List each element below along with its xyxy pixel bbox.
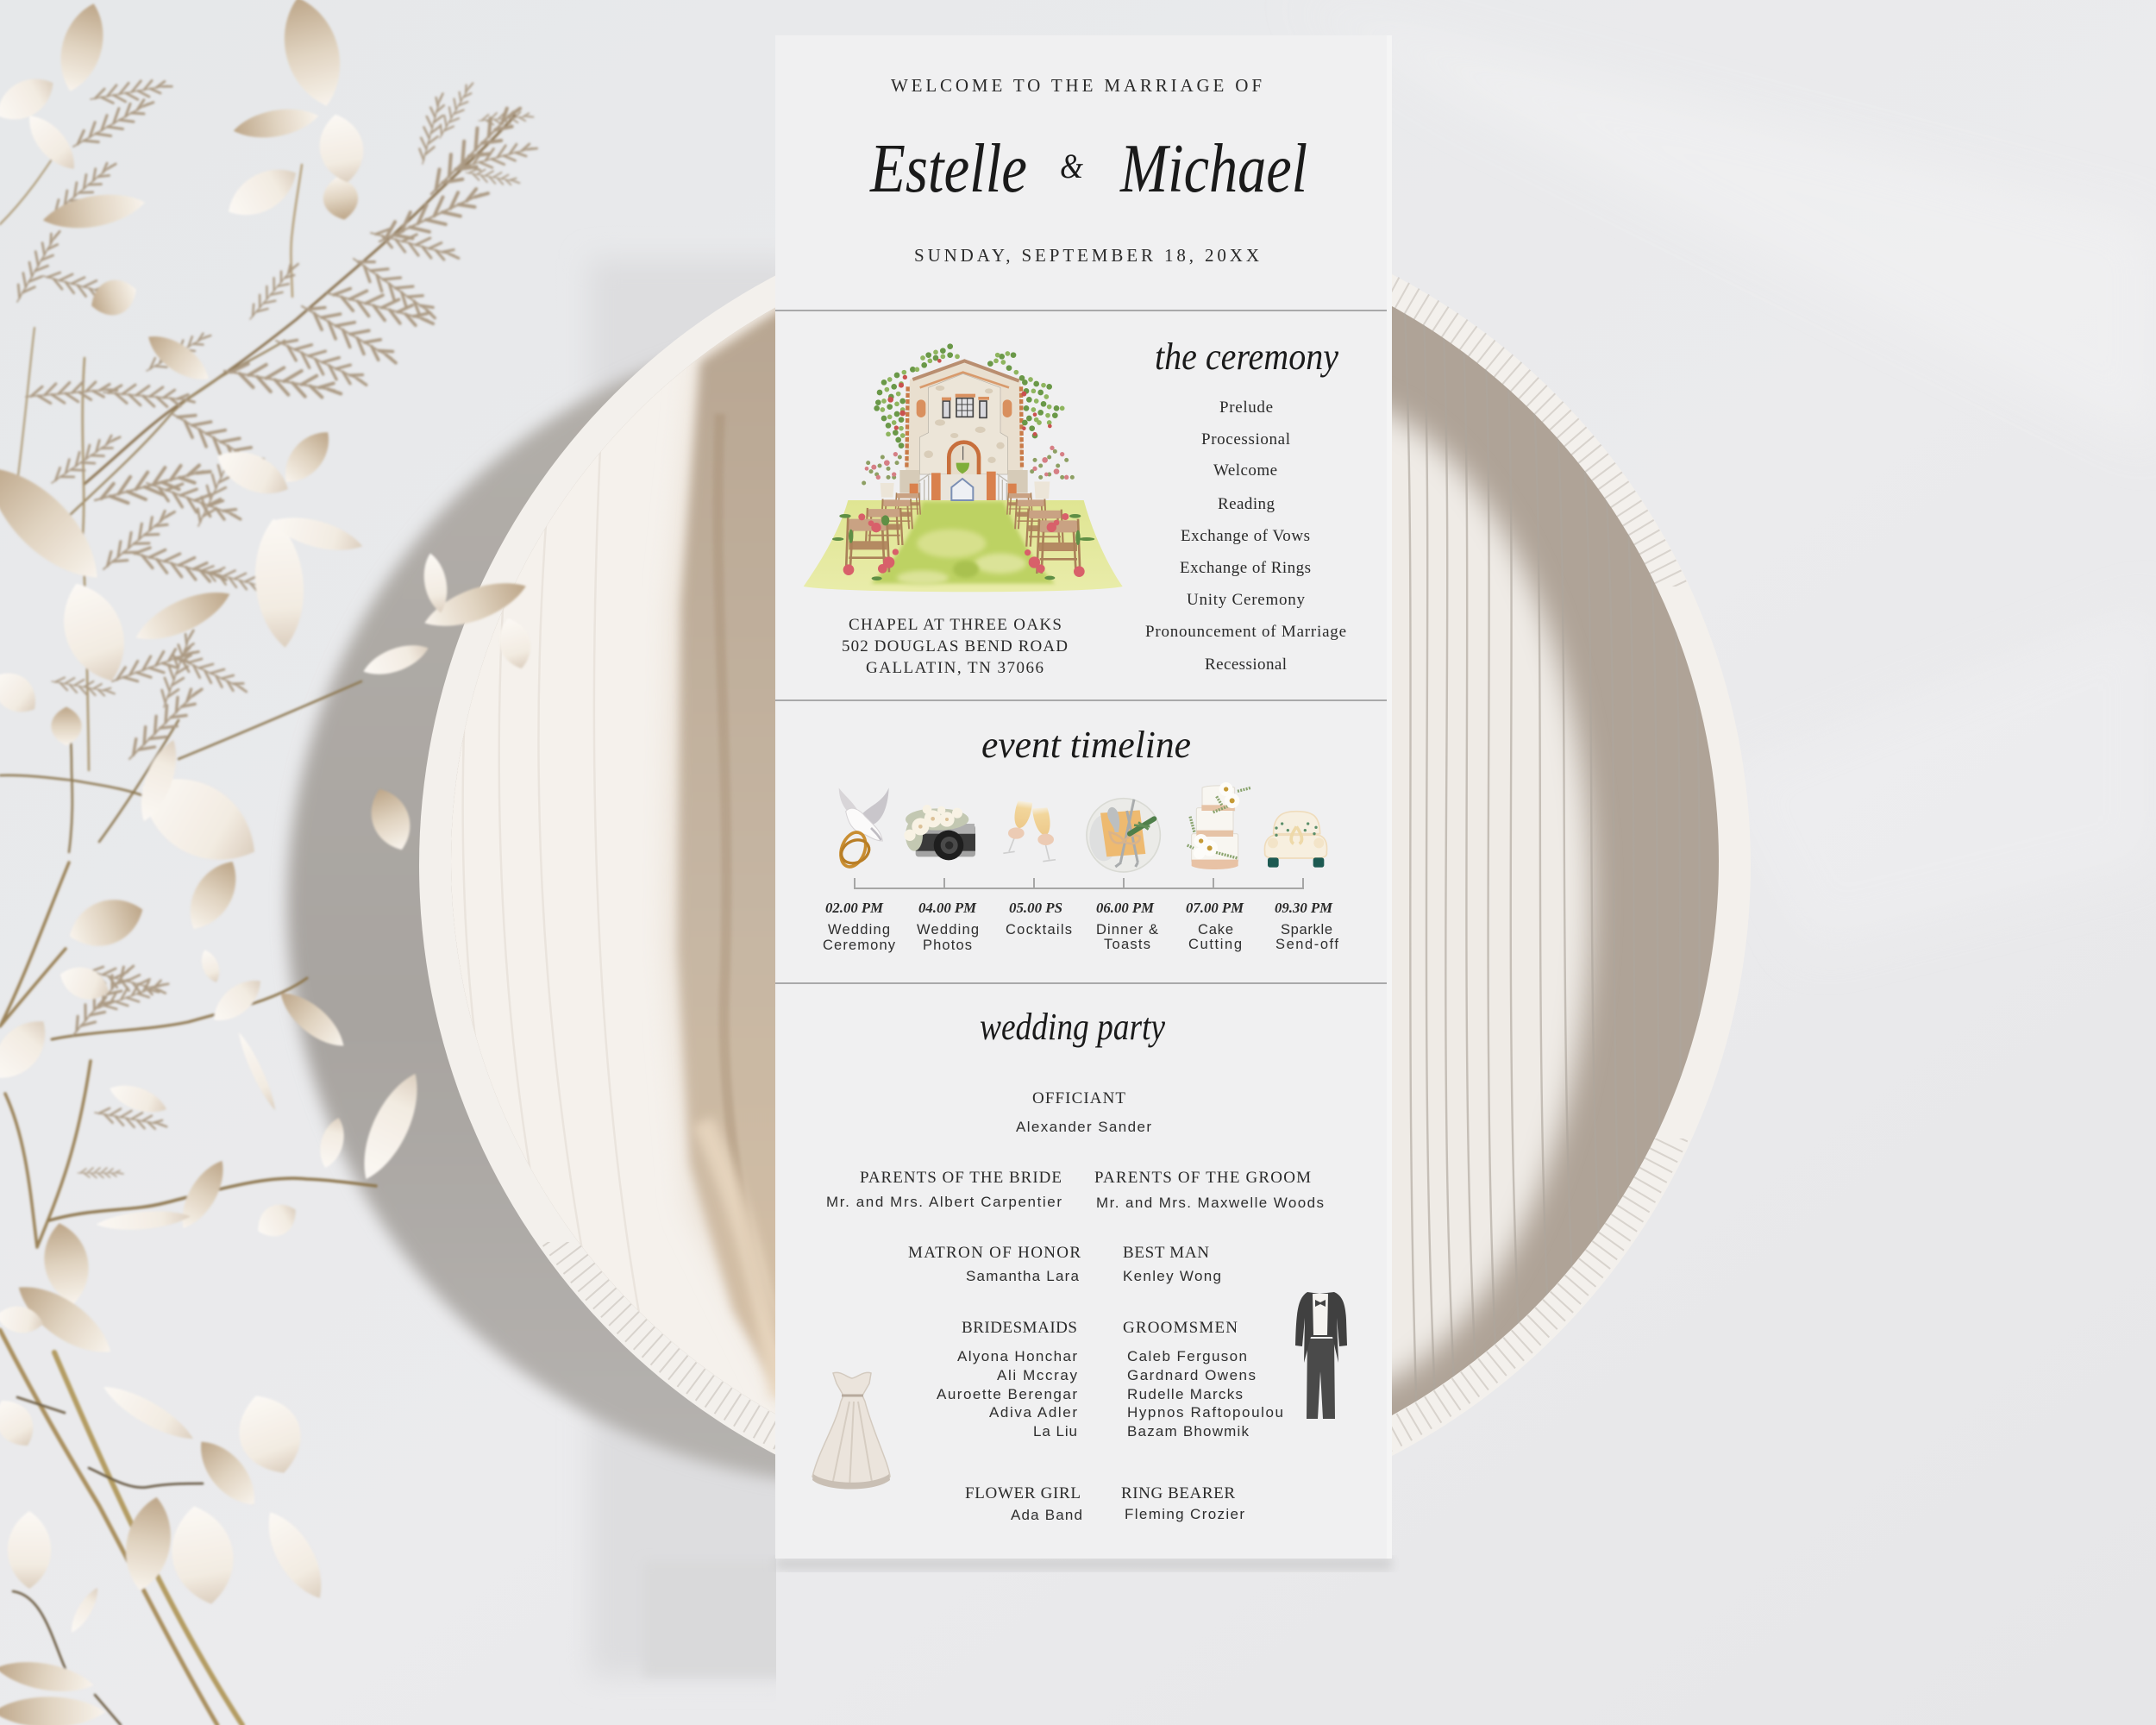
venue address: CHAPEL AT THREE OAKS [849,616,1062,634]
icon: getaway car [1264,812,1327,868]
groomsmen: GROOMSMEN [1123,1319,1238,1337]
card cast shadow [278,263,776,1680]
couple names [869,131,1307,207]
timeline times: 09.30 PM [1275,900,1333,916]
heading: the ceremony: the ceremony [1155,336,1338,378]
shadow under card [775,1558,1392,1570]
parents of the groom: PARENTS OF THE GROOM [1094,1169,1311,1187]
matron of honor: Samantha Lara [966,1268,1080,1284]
matron of honor [908,1244,1081,1284]
bridesmaids: Alyona Honchar [957,1348,1077,1364]
plate rim [419,199,1751,1531]
matron of honor: MATRON OF HONOR [908,1244,1081,1262]
flower girl: FLOWER GIRL [965,1484,1081,1502]
groomsmen: Caleb Ferguson [1127,1348,1247,1364]
officiant: Alexander Sander [1016,1119,1151,1135]
flower girl [965,1484,1082,1523]
ceremony order list: Processional [1201,430,1290,448]
wooden plate [419,274,1751,1456]
ceremony order list: Exchange of Rings [1180,559,1311,577]
tan leaves [0,0,531,1725]
timeline icons left [837,787,1056,870]
ceremony order list [1145,398,1346,674]
venue address [842,616,1068,677]
officiant [1016,1089,1151,1135]
header: welcome and names [869,75,1307,266]
ceremony order list: Prelude [1219,398,1273,417]
groomsmen [1123,1319,1283,1440]
timeline event labels: Sparkle [1281,922,1332,938]
bridesmaids: La Liu [1033,1423,1077,1440]
divider lines [775,310,1387,983]
ceremony order list: Recessional [1205,656,1287,674]
officiant: OFFICIANT [1032,1089,1125,1107]
icon: camera with flowers [904,805,975,860]
icon: wedding cake [1188,782,1251,869]
bridesmaids: Auroette Berengar [937,1386,1077,1402]
grass sprigs [9,76,539,1177]
timeline event labels: Wedding [917,922,979,938]
icon: dove with rings [837,787,889,870]
icon: wedding dress [812,1372,890,1489]
timeline event labels: Dinner & [1096,922,1158,938]
ring bearer [1121,1484,1244,1522]
icon: groom tuxedo [1295,1292,1347,1419]
date line: SUNDAY, SEPTEMBER 18, 20XX [914,245,1259,266]
groomsmen: Hypnos Raftopoulou [1127,1404,1283,1421]
ring bearer: RING BEARER [1121,1484,1235,1502]
timeline event labels: Cake [1198,922,1233,938]
parents of the groom: Mr. and Mrs. Maxwelle Woods [1096,1195,1324,1211]
timeline event labels [823,922,1338,953]
timeline times [825,900,1333,916]
plate interior [451,306,1719,1415]
welcome line: WELCOME TO THE MARRIAGE OF [891,75,1262,96]
heading: wedding party: wedding party [980,1006,1165,1048]
best man: Kenley Wong [1123,1268,1221,1284]
flower girl: Ada Band [1011,1507,1082,1523]
bridesmaids: BRIDESMAIDS [962,1319,1077,1337]
timeline times: 07.00 PM [1186,900,1244,916]
card: program background [775,35,1392,1559]
timeline event labels: Photos [923,938,972,953]
parents of the bride: PARENTS OF THE BRIDE [860,1169,1062,1187]
bridesmaids [937,1319,1078,1440]
dried floral branches [0,0,539,1725]
timeline event labels: Cutting [1188,937,1242,952]
best man [1123,1244,1221,1284]
stems [0,116,515,1725]
venue address: GALLATIN, TN 37066 [866,659,1044,677]
parents of the bride: Mr. and Mrs. Albert Carpentier [826,1194,1062,1210]
cream leaves [0,68,536,1636]
timeline times: 02.00 PM [825,900,884,916]
groomsmen: Rudelle Marcks [1127,1386,1243,1402]
timeline event labels: Send-off [1275,937,1338,952]
timeline event labels: Wedding [828,922,890,938]
bridesmaids: Adiva Adler [989,1404,1077,1421]
venue address: 502 DOUGLAS BEND ROAD [842,637,1068,656]
timeline event labels: Toasts [1104,937,1150,952]
timeline icons right [1087,782,1327,872]
wedding party roles and names [826,1089,1324,1523]
couple names: Estelle [869,131,1027,207]
timeline times: 06.00 PM [1096,900,1155,916]
timeline event labels: Cocktails [1006,922,1072,938]
timeline event labels: Ceremony [823,938,896,953]
bridesmaids: Ali Mccray [997,1367,1078,1383]
couple names: Michael [1119,131,1307,207]
parents of the groom [1094,1169,1324,1211]
timeline times: 04.00 PM [918,900,977,916]
ceremony order list: Welcome [1213,461,1277,480]
ceremony order list: Reading [1218,495,1275,513]
illustration: chapel on lawn [804,347,1123,592]
best man: BEST MAN [1123,1244,1209,1262]
parents of the bride [826,1169,1062,1210]
icon: place setting [1087,799,1160,872]
ring bearer: Fleming Crozier [1125,1506,1244,1522]
groomsmen: Bazam Bhowmik [1127,1423,1249,1440]
ceremony order list: Unity Ceremony [1187,591,1306,609]
timeline axis with ticks [855,878,1303,888]
icon: champagne flutes [1003,800,1056,862]
groomsmen: Gardnard Owens [1127,1367,1256,1383]
ceremony order list: Exchange of Vows [1181,527,1310,545]
heading: event timeline: event timeline [981,724,1191,766]
couple names: & [1060,147,1083,185]
ceremony order list: Pronouncement of Marriage [1145,623,1346,641]
timeline times: 05.00 PS [1009,900,1062,916]
